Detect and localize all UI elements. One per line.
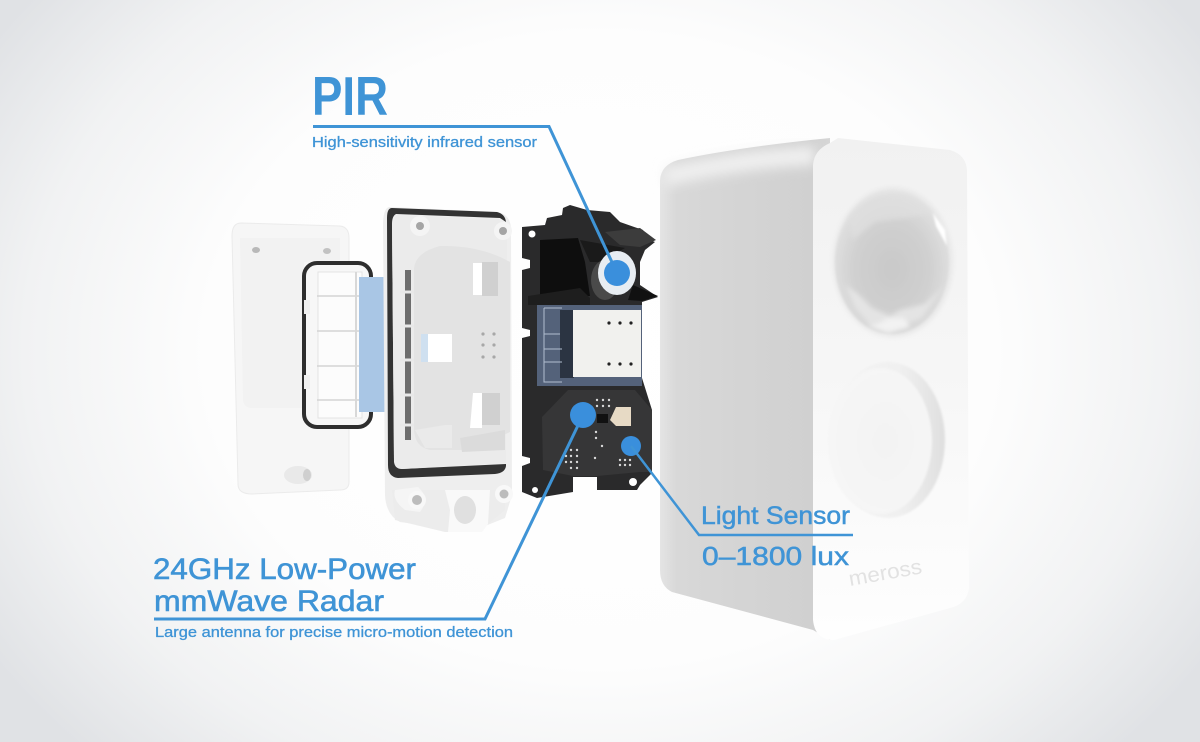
light sensor lens — [831, 362, 945, 518]
board interior shadow — [540, 238, 590, 296]
light sensor range: 0–1800 lux — [702, 541, 849, 571]
callout: PIR — [312, 65, 630, 286]
gasket — [387, 208, 506, 478]
light sensor heading: Light Sensor — [701, 502, 850, 530]
dome highlight — [933, 213, 947, 246]
radar heading: 24GHz Low-Power — [153, 553, 416, 586]
mounting housing — [383, 207, 513, 532]
blue insulation sheet — [359, 277, 385, 412]
callout: radar — [153, 402, 596, 641]
wireless module — [537, 305, 642, 386]
center window — [428, 334, 452, 362]
callout: light sensor — [621, 436, 853, 571]
front face light edge — [958, 165, 962, 590]
radar marker — [570, 402, 596, 428]
chip — [597, 414, 608, 423]
body front face — [813, 138, 969, 640]
logo: meross — [847, 555, 924, 591]
light sensor leader line — [631, 446, 853, 535]
side slots — [405, 270, 411, 440]
radar leader line — [154, 415, 583, 619]
PIR leader line — [313, 126, 617, 273]
inner cover — [414, 246, 510, 450]
PIR heading: PIR — [312, 65, 388, 127]
screw bosses — [410, 216, 430, 236]
radar description: Large antenna for precise micro-motion detection — [155, 625, 513, 641]
seal frame with gasket — [304, 263, 371, 427]
PIR marker — [604, 260, 630, 286]
body side highlight — [665, 146, 815, 186]
radar heading: mmWave Radar — [154, 585, 384, 618]
vent holes — [481, 332, 496, 359]
PIR description: High-sensitivity infrared sensor — [312, 135, 537, 151]
circuit board — [522, 205, 658, 498]
body side — [660, 138, 830, 640]
lower cut-out — [470, 393, 482, 428]
sensor body — [660, 138, 969, 640]
back plate — [232, 223, 349, 494]
upper cut-out — [473, 263, 482, 295]
foot — [392, 490, 505, 532]
dome facets — [845, 195, 945, 333]
lower latch — [415, 425, 452, 448]
light sensor marker — [621, 436, 641, 456]
PIR dome — [833, 187, 953, 337]
radar board — [542, 390, 652, 476]
PIR sensor barrel — [605, 228, 656, 247]
solder pads — [565, 399, 631, 469]
